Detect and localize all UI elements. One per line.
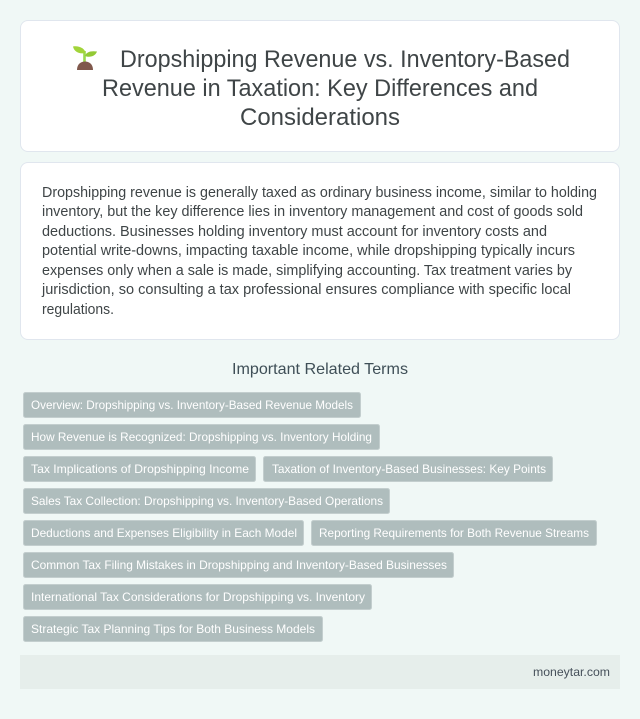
summary text: jurisdiction, so consulting a tax professional ensures compliance with specific local xyxy=(41,282,571,298)
panel: footer bar xyxy=(20,655,620,689)
summary text: potential write-downs, impacting taxable income, while dropshipping typically incurs xyxy=(42,243,575,259)
icon: seedling xyxy=(73,46,97,70)
summary text: expenses only when a sale is made, simplifying accounting. Tax treatment varies by xyxy=(42,263,573,279)
panel: title card xyxy=(20,20,620,152)
summary text: Dropshipping revenue is generally taxed as ordinary business income, similar to holding xyxy=(42,185,597,201)
tag list: International Tax Considerations for Dropshipping vs. Inventory xyxy=(31,590,365,604)
heading: related terms: Important Related Terms xyxy=(232,361,408,378)
tag list: Overview: Dropshipping vs. Inventory-Based Revenue Models xyxy=(31,398,353,412)
tag list: Sales Tax Collection: Dropshipping vs. Inventory-Based Operations xyxy=(31,494,383,508)
tag list: Tax Implications of Dropshipping Income xyxy=(31,462,249,476)
tag list: Taxation of Inventory-Based Businesses: Key Points xyxy=(272,462,546,476)
tag list xyxy=(24,392,596,642)
title: Dropshipping Revenue vs. Inventory-Based xyxy=(120,46,570,73)
summary text: regulations. xyxy=(42,302,114,318)
title: Revenue in Taxation: Key Differences and xyxy=(102,75,538,102)
footer text: moneytar.com xyxy=(533,665,610,679)
summary text xyxy=(41,185,597,318)
panel: summary card xyxy=(20,162,620,340)
tag list: Deductions and Expenses Eligibility in Each Model xyxy=(31,526,297,540)
tag list: Reporting Requirements for Both Revenue Streams xyxy=(319,526,589,540)
tag list: Common Tax Filing Mistakes in Dropshipping and Inventory-Based Businesses xyxy=(31,558,447,572)
tag list: Strategic Tax Planning Tips for Both Business Models xyxy=(31,622,315,636)
title: Considerations xyxy=(240,104,400,131)
title xyxy=(102,46,570,131)
summary text: inventory, but the key difference lies in inventory management and cost of goods sold xyxy=(42,204,583,220)
summary text: deductions. Businesses holding inventory must account for inventory costs and xyxy=(42,224,547,240)
tag list: How Revenue is Recognized: Dropshipping vs. Inventory Holding xyxy=(31,430,372,444)
